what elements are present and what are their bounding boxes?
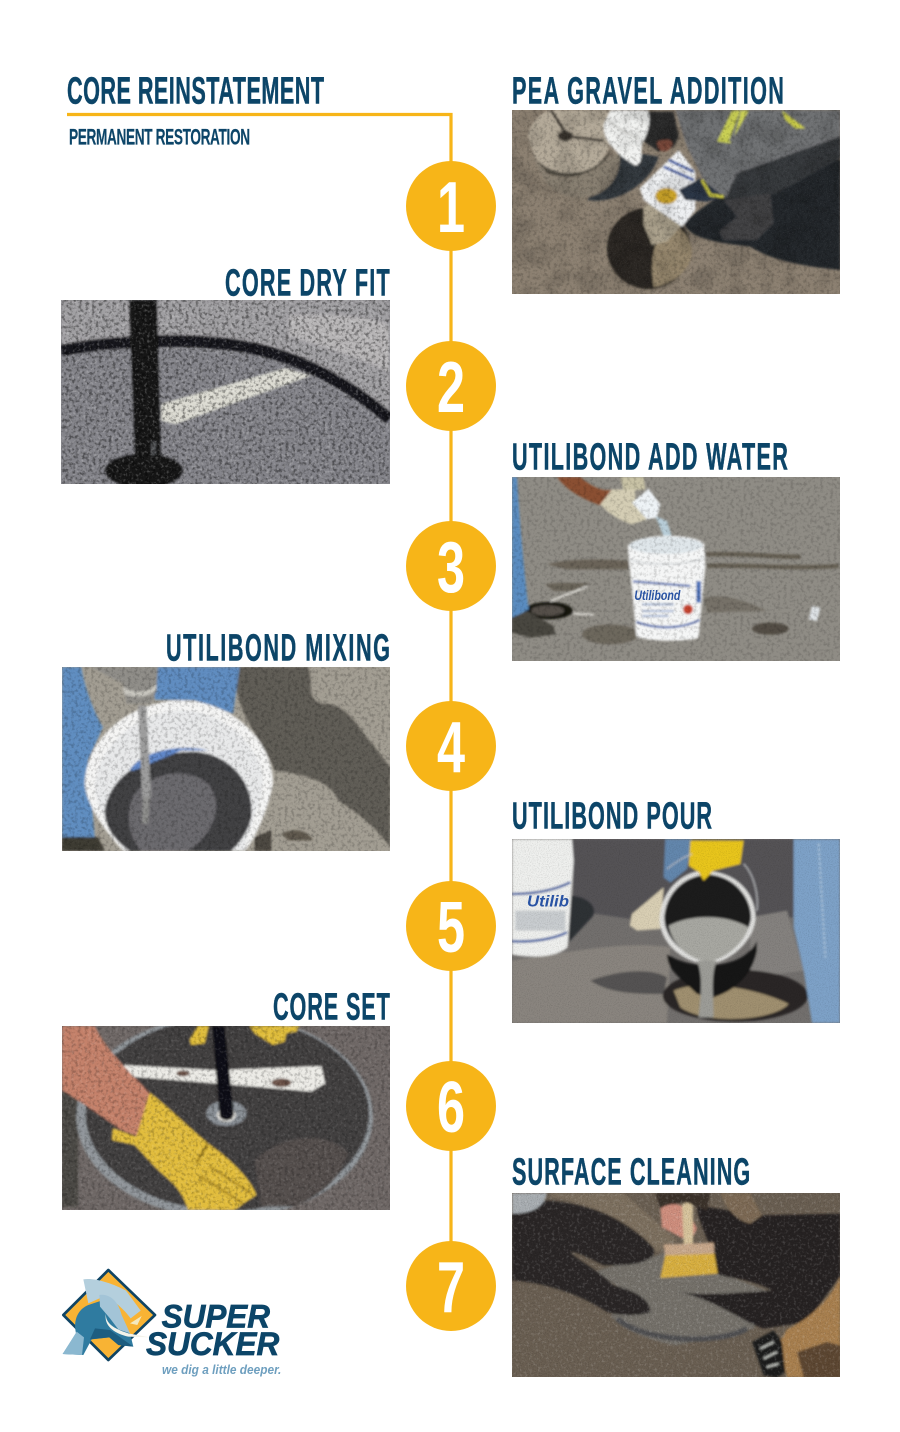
icon: yellow diamond xyxy=(63,1270,155,1360)
photo: utilibond mixing xyxy=(62,667,390,851)
heading: surface cleaning: SURFACE CLEANING xyxy=(512,1150,750,1193)
step 1 badge xyxy=(406,161,496,251)
photo: utilibond add water: Utilibond xyxy=(634,587,681,603)
photo: core dry fit xyxy=(61,300,390,484)
photo: utilibond pour: Utilib xyxy=(527,894,569,911)
step 3 badge xyxy=(406,521,496,611)
photo: core set xyxy=(62,1026,390,1210)
step 6 badge: 6 xyxy=(437,1068,465,1148)
main title: CORE REINSTATEMENT xyxy=(67,69,324,112)
step 2 badge: 2 xyxy=(437,348,465,428)
icon: elephant xyxy=(63,1279,150,1355)
heading: core dry fit: CORE DRY FIT xyxy=(225,261,390,304)
heading: core set: CORE SET xyxy=(273,985,390,1028)
wordmark: super: SUPER xyxy=(162,1297,270,1334)
step 6 badge xyxy=(406,1061,496,1151)
wordmark: sucker: SUCKER xyxy=(146,1325,280,1362)
step 7 badge: 7 xyxy=(437,1248,465,1328)
heading: pea gravel addition: PEA GRAVEL ADDITION xyxy=(512,69,784,112)
timeline connector line xyxy=(67,114,451,1290)
photo: surface cleaning xyxy=(512,1193,840,1377)
step 5 badge: 5 xyxy=(437,888,465,968)
step 4 badge xyxy=(406,701,496,791)
photo: utilibond pour xyxy=(512,839,840,1023)
heading: utilibond mixing: UTILIBOND MIXING xyxy=(166,626,390,669)
step 4 badge: 4 xyxy=(437,708,465,788)
subtitle: PERMANENT RESTORATION xyxy=(69,124,250,149)
logo: super sucker xyxy=(62,1268,281,1377)
step 3 badge: 3 xyxy=(437,528,465,608)
photo: pea gravel addition xyxy=(512,110,840,294)
step 2 badge xyxy=(406,341,496,431)
step 1 badge: 1 xyxy=(437,168,465,248)
step 5 badge xyxy=(406,881,496,971)
heading: utilibond add water: UTILIBOND ADD WATER xyxy=(512,435,788,478)
step 7 badge xyxy=(406,1241,496,1331)
heading: utilibond pour: UTILIBOND POUR xyxy=(512,794,712,837)
photo: utilibond add water xyxy=(512,477,840,661)
